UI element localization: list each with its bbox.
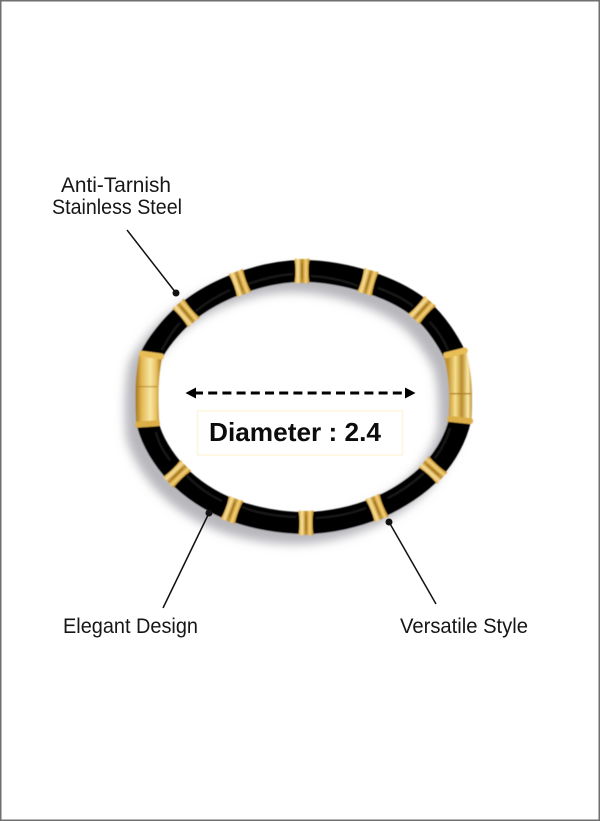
callout: versatile style [386, 518, 528, 638]
enamel highlights [156, 274, 450, 518]
callout: versatile style: Versatile Style [400, 615, 528, 638]
right gold tube [443, 347, 473, 424]
bracelet shadow [136, 281, 450, 533]
gold spacer rings [163, 258, 447, 536]
bracelet [135, 258, 473, 536]
diameter label box [198, 411, 402, 455]
diameter label box: Diameter : 2.4 [209, 417, 382, 447]
callout: anti-tarnish stainless steel [52, 174, 182, 296]
left gold tube [135, 350, 164, 428]
diameter arrow [186, 388, 416, 398]
callout: anti-tarnish stainless steel: Anti-Tarnish [61, 174, 171, 197]
callout: anti-tarnish stainless steel: Stainless Steel [52, 196, 182, 219]
black enamel ring [147, 271, 461, 523]
callout: elegant design [63, 510, 212, 638]
callout: elegant design: Elegant Design [63, 615, 198, 638]
